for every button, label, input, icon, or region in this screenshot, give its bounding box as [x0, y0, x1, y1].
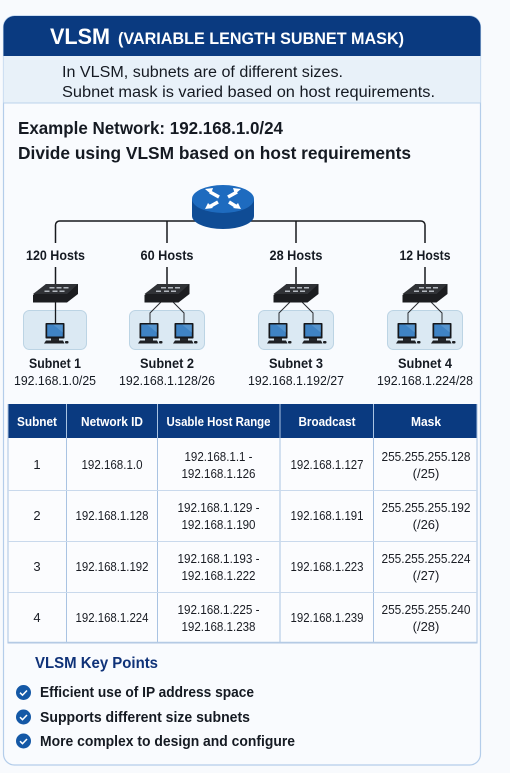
row 2: 255.255.255.192: [382, 500, 470, 515]
subnet 1 group: [14, 284, 96, 388]
row 2: 192.168.1.190: [182, 517, 256, 532]
subnet 2 group: [119, 284, 215, 388]
hosts labels: 60 Hosts: [140, 248, 194, 263]
subnet 4 group: Subnet 4: [398, 356, 452, 371]
subnet 1 group: Subnet 1: [29, 356, 81, 371]
title: VLSM: [50, 24, 110, 49]
header: title bar: [4, 16, 480, 56]
row 3: 3: [33, 559, 41, 574]
hosts labels: [26, 248, 450, 263]
row 1: 192.168.1.0: [82, 457, 142, 472]
key points heading: VLSM Key Points: [35, 655, 158, 672]
row 3: 192.168.1.192: [76, 559, 148, 574]
key points list: Efficient use of IP address space: [40, 685, 254, 701]
example network heading: Example Network: 192.168.1.0/24: [18, 118, 283, 138]
row 4: 192.168.1.239: [290, 610, 364, 625]
row 2: [33, 500, 470, 532]
row 2: 192.168.1.191: [290, 508, 364, 523]
subnet 2 group: 192.168.1.128/26: [119, 373, 215, 388]
subnet 3 group: Subnet 3: [269, 356, 323, 371]
row 2: 192.168.1.128: [76, 508, 148, 523]
subnet table: Broadcast: [298, 414, 356, 429]
row 4: 255.255.255.240: [382, 602, 470, 617]
subtitle: (VARIABLE LENGTH SUBNET MASK): [118, 29, 404, 48]
example network heading: Divide using VLSM based on host requirements: [18, 143, 411, 163]
hosts labels: 120 Hosts: [26, 248, 85, 263]
subnet 3 group: 192.168.1.192/27: [248, 373, 344, 388]
row 1: 192.168.1.126: [182, 466, 256, 481]
row 1: 192.168.1.127: [290, 457, 364, 472]
definition text: In VLSM, subnets are of different sizes.: [62, 64, 343, 81]
row 2: 192.168.1.129 -: [178, 500, 260, 515]
row 3: 192.168.1.222: [182, 568, 256, 583]
row 3: (/27): [413, 568, 439, 583]
example network heading: [18, 118, 411, 163]
row 2: (/26): [413, 517, 439, 532]
row 1: 192.168.1.1 -: [184, 449, 252, 464]
key points list: Supports different size subnets: [40, 710, 250, 726]
row 3: 255.255.255.224: [382, 551, 470, 566]
row 1: (/25): [413, 466, 439, 481]
row 4: 192.168.1.238: [182, 619, 256, 634]
row 3: [33, 551, 470, 583]
network connector lines: [56, 221, 425, 300]
subnet table: Usable Host Range: [166, 414, 270, 429]
subnet 4 group: 192.168.1.224/28: [377, 373, 473, 388]
row 4: (/28): [413, 619, 439, 634]
row 4: [33, 602, 470, 634]
subnet 3 group: [248, 284, 344, 388]
definition band: Subnet mask is varied based on host requirements.: [62, 84, 435, 101]
key points list: More complex to design and configure: [40, 734, 295, 750]
subnet 2 group: Subnet 2: [140, 356, 194, 371]
icon: router: [192, 185, 254, 229]
row 3: 192.168.1.223: [290, 559, 364, 574]
table header: [8, 404, 477, 438]
subnet 1 group: 192.168.1.0/25: [14, 373, 96, 388]
subnet table: Mask: [411, 414, 442, 429]
row 1: 1: [33, 457, 41, 472]
key points list: [16, 685, 295, 750]
hosts labels: 28 Hosts: [270, 248, 322, 263]
subnet table: Network ID: [81, 414, 143, 429]
subnet table: [8, 404, 477, 643]
definition band: [4, 56, 480, 104]
row 3: 192.168.1.193 -: [178, 551, 260, 566]
hosts labels: 12 Hosts: [400, 248, 450, 263]
header labels: Subnet: [17, 414, 58, 429]
row 4: 4: [33, 610, 41, 625]
subnet 4 group: [377, 284, 473, 388]
row 1: [33, 449, 470, 481]
row 4: 192.168.1.225 -: [178, 602, 260, 617]
row 2: 2: [33, 508, 41, 523]
row 1: 255.255.255.128: [382, 449, 470, 464]
row 4: 192.168.1.224: [76, 610, 148, 625]
